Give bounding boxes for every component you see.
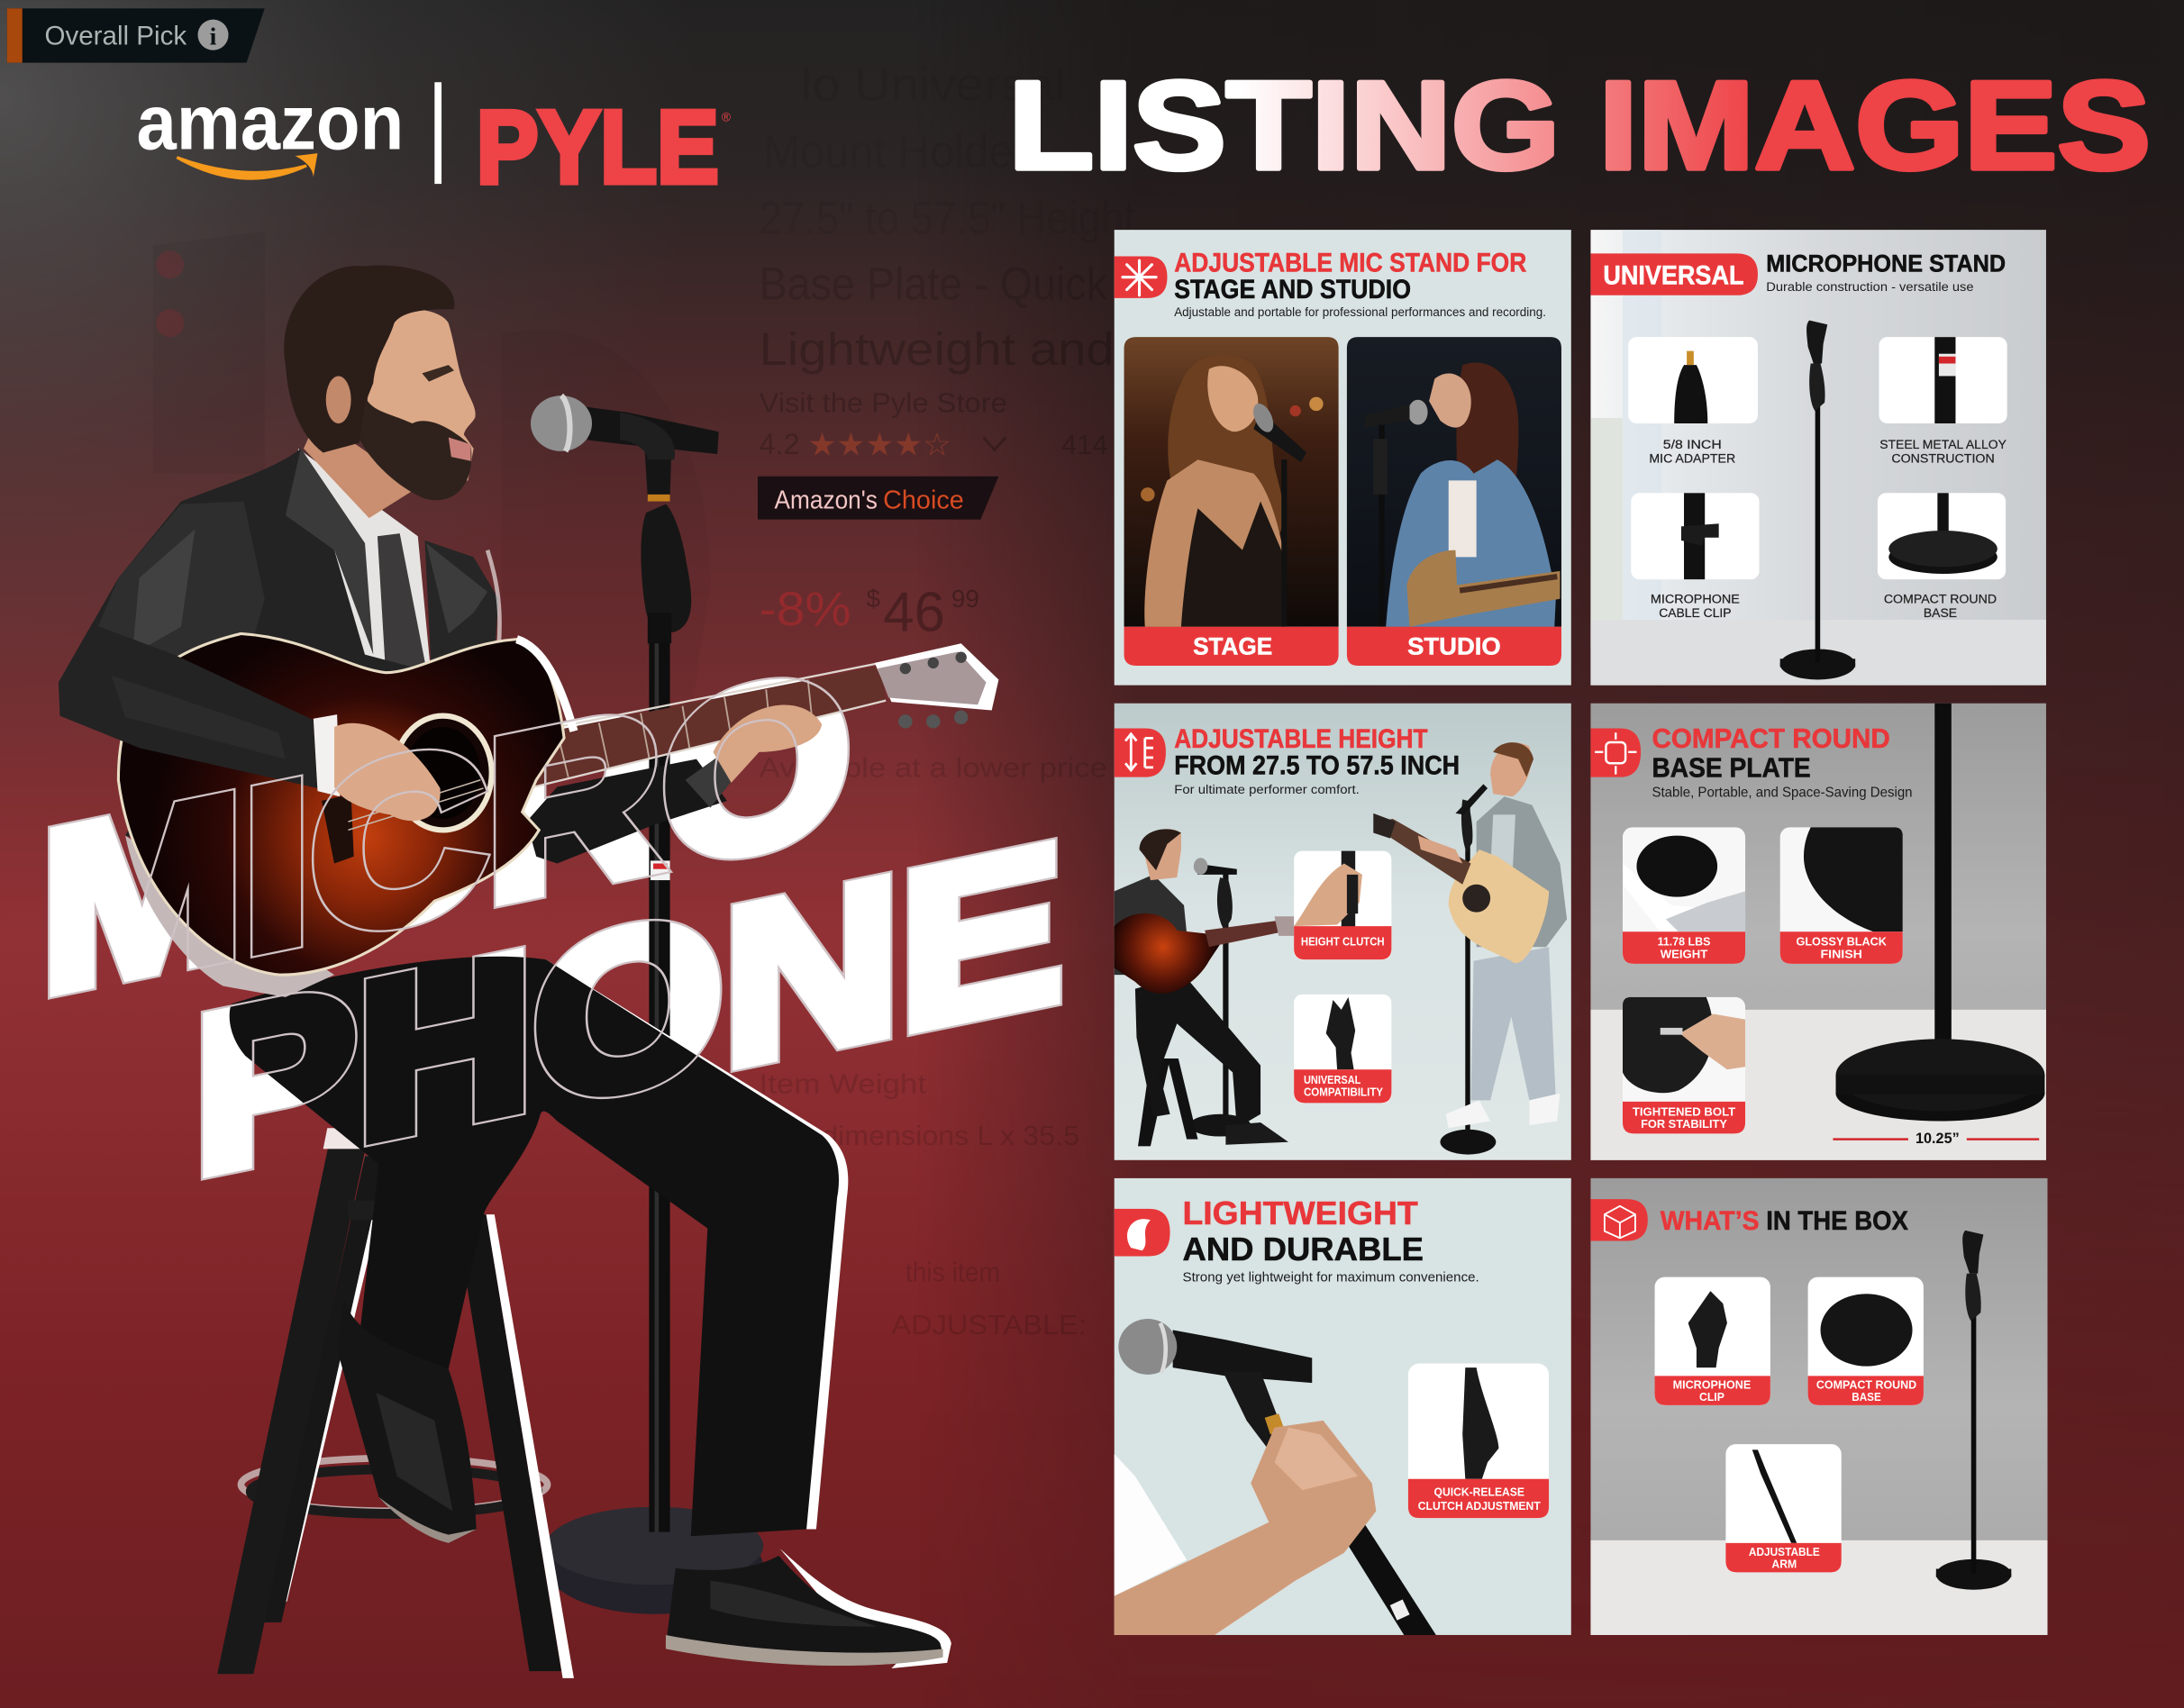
figure: seated guitarist with stand <box>1115 829 1298 1146</box>
heading: IN THE BOX <box>1766 1206 1908 1236</box>
ghosted product listing behind: 27.5" to 57.5" Height <box>760 193 1135 244</box>
panel: adjustable mic stand <box>1115 230 1571 686</box>
card: round base: BASE <box>1924 605 1957 620</box>
card: steel: STEEL METAL ALLOY <box>1879 437 2007 451</box>
heading <box>1174 248 1546 319</box>
card: mic adapter <box>1628 337 1758 465</box>
forearm, cuff and hands <box>59 624 822 821</box>
big word white fill: MICRO <box>41 622 851 1042</box>
heading <box>1766 250 2006 294</box>
panel: what's in the box <box>1590 1178 2047 1635</box>
badge: amazon's choice: Choice <box>883 486 964 514</box>
card: round base <box>1878 493 2006 620</box>
big word white fill: PHONE <box>194 795 1063 1222</box>
card: universal compatibility: UNIVERSAL <box>1304 1073 1360 1086</box>
icon: box <box>1590 1199 1648 1240</box>
card: height clutch <box>1294 851 1391 959</box>
heading: Durable construction - versatile use <box>1766 279 1974 294</box>
heading: STAGE AND STUDIO <box>1174 275 1411 304</box>
ghosted product listing behind: $ <box>867 585 881 613</box>
panel: compact round base plate <box>1590 704 2046 1160</box>
big word white fill <box>41 622 1063 1222</box>
heading: COMPACT ROUND <box>1652 722 1890 754</box>
heading <box>1652 722 1913 800</box>
heading: BASE PLATE <box>1652 752 1811 784</box>
heading: AND DURABLE <box>1182 1231 1424 1267</box>
hero: musician with guitar, stool and stand <box>59 265 998 1678</box>
card: finish: GLOSSY BLACK <box>1796 935 1887 949</box>
badge: overall pick: i <box>210 23 217 51</box>
card: weight: 11.78 LBS <box>1658 935 1711 949</box>
card: universal compatibility <box>1294 995 1391 1103</box>
ghosted product listing behind: Item Weight <box>760 1068 926 1100</box>
heading <box>1661 1206 1908 1236</box>
photo: stage <box>1124 337 1339 627</box>
card: steel <box>1879 337 2007 465</box>
card: bolt: TIGHTENED BOLT <box>1633 1104 1735 1118</box>
card: adjustable arm <box>1725 1444 1842 1572</box>
heading: Adjustable and portable for professional performances and recording. <box>1174 304 1546 319</box>
big word outline over musician <box>48 677 1063 1181</box>
logo: amazon: amazon <box>137 79 404 166</box>
panel: adjustable height <box>1115 704 1571 1160</box>
ghosted product listing behind: Mount Holder <box>763 126 1028 177</box>
card: mic adapter: MIC ADAPTER <box>1649 450 1735 465</box>
label: studio <box>1347 627 1561 666</box>
badge: universal: UNIVERSAL <box>1603 260 1744 290</box>
ghosted product listing behind: lo Universal <box>801 59 1066 110</box>
ghosted product listing behind: this item <box>905 1256 1000 1287</box>
guitar neck <box>480 643 998 796</box>
stand base <box>546 1507 763 1614</box>
panel: lightweight and durable <box>1115 1178 1571 1635</box>
ghosted product listing behind: 4.2 <box>760 428 800 460</box>
card: adjustable arm: ARM <box>1771 1558 1797 1571</box>
card: microphone clip: CLIP <box>1699 1390 1724 1404</box>
icon: compact square <box>1590 729 1641 777</box>
card: bolt <box>1623 997 1745 1133</box>
ghosted product listing behind: Base Plate - Quick <box>760 258 1107 309</box>
ghosted product listing behind: ★★★★☆ <box>808 427 951 463</box>
divider <box>434 82 441 184</box>
figure: standing guitarist with stand <box>1373 742 1567 1155</box>
card: cable clip: CABLE CLIP <box>1659 605 1732 620</box>
trousers <box>230 957 839 1536</box>
heading: FROM 27.5 TO 57.5 INCH <box>1174 751 1460 781</box>
logo: pyle: PYLE <box>477 90 719 205</box>
ghosted product listing behind: dimensions L x 35.5 <box>822 1120 1079 1151</box>
neck and head <box>284 265 476 518</box>
panel: universal microphone stand <box>1590 230 2046 686</box>
card: bolt: FOR STABILITY <box>1641 1117 1727 1131</box>
ghosted product listing behind: -8% <box>760 583 851 636</box>
ghosted product listing behind: ADJUSTABLE: <box>891 1309 1087 1340</box>
heading: ADJUSTABLE MIC STAND FOR <box>1174 248 1526 277</box>
microphone <box>531 395 719 459</box>
icon: arrows burst <box>1115 256 1167 298</box>
title: LISTING IMAGES <box>1008 56 2151 195</box>
right sleeve <box>526 759 727 864</box>
card: compact round base <box>1808 1277 1924 1405</box>
card: steel: CONSTRUCTION <box>1891 450 1995 465</box>
label: studio: STUDIO <box>1407 633 1501 660</box>
card: finish <box>1780 827 1903 964</box>
product: hands holding mic stand <box>1115 1319 1436 1635</box>
stool <box>217 1128 574 1678</box>
product: stand <box>1936 1231 2011 1590</box>
label: stage: STAGE <box>1193 633 1272 660</box>
badge: amazon's choice <box>758 477 998 520</box>
logo: pyle: ® <box>722 110 732 124</box>
heading: Stable, Portable, and Space-Saving Design <box>1652 785 1913 800</box>
heading: Strong yet lightweight for maximum convenience. <box>1182 1270 1479 1285</box>
card: adjustable arm: ADJUSTABLE <box>1749 1545 1820 1558</box>
icon: feather <box>1115 1209 1170 1256</box>
card: mic adapter: 5/8 INCH <box>1663 437 1722 451</box>
product: stand <box>1780 321 1855 679</box>
ghosted product listing behind: 414 <box>1061 429 1108 460</box>
badge: overall pick <box>7 8 265 63</box>
card: cable clip: MICROPHONE <box>1651 591 1740 605</box>
photo: studio <box>1347 337 1561 627</box>
card: microphone clip: MICROPHONE <box>1673 1377 1751 1391</box>
card: quick release: CLUTCH ADJUSTMENT <box>1418 1499 1541 1513</box>
card: weight: WEIGHT <box>1661 948 1707 961</box>
card: quick release <box>1408 1363 1549 1518</box>
heading: WHAT’S <box>1661 1206 1759 1236</box>
card: cable clip <box>1631 493 1759 620</box>
card: weight <box>1623 827 1745 964</box>
heading: For ultimate performer comfort. <box>1174 782 1360 796</box>
heading <box>1182 1195 1479 1285</box>
ghosted product listing behind: 99 <box>951 585 979 613</box>
card: height clutch: HEIGHT CLUTCH <box>1301 935 1385 949</box>
card: compact round base: COMPACT ROUND <box>1816 1377 1916 1391</box>
card: round base: COMPACT ROUND <box>1884 591 1997 605</box>
jacket <box>59 449 500 891</box>
stand pole and clutch <box>641 452 691 1532</box>
badge: universal <box>1590 253 1758 295</box>
shoe: right <box>666 1556 943 1666</box>
product: base with pole <box>1836 704 2044 1122</box>
shirt and tie <box>298 449 432 683</box>
ghosted product listing behind: 46 <box>883 581 945 643</box>
heading <box>1174 724 1460 796</box>
label: stage <box>1124 627 1339 666</box>
badge: overall pick: Overall Pick <box>44 22 187 51</box>
card: finish: FINISH <box>1821 948 1862 961</box>
badge: amazon's choice: Amazon's <box>775 486 878 514</box>
card: microphone clip <box>1655 1277 1770 1405</box>
guitar body <box>118 633 574 997</box>
heading: ADJUSTABLE HEIGHT <box>1174 724 1428 754</box>
icon: height arrows <box>1115 729 1166 777</box>
ghosted product listing behind: Available at a lower price <box>760 752 1107 784</box>
heading: LIGHTWEIGHT <box>1182 1195 1418 1231</box>
dimension: 10.25” <box>1916 1131 1960 1147</box>
card: compact round base: BASE <box>1852 1390 1881 1404</box>
ghosted product listing behind: Lightweight and <box>760 323 1115 375</box>
leg halo <box>546 959 848 1529</box>
ghosted product listing behind: Visit the Pyle Store <box>760 387 1007 419</box>
card: universal compatibility: COMPATIBILITY <box>1304 1086 1383 1099</box>
shoe: left <box>337 1299 477 1543</box>
heading: MICROPHONE STAND <box>1766 250 2006 277</box>
ghosted product listing behind <box>153 59 1135 1340</box>
card: quick release: QUICK-RELEASE <box>1434 1485 1524 1498</box>
